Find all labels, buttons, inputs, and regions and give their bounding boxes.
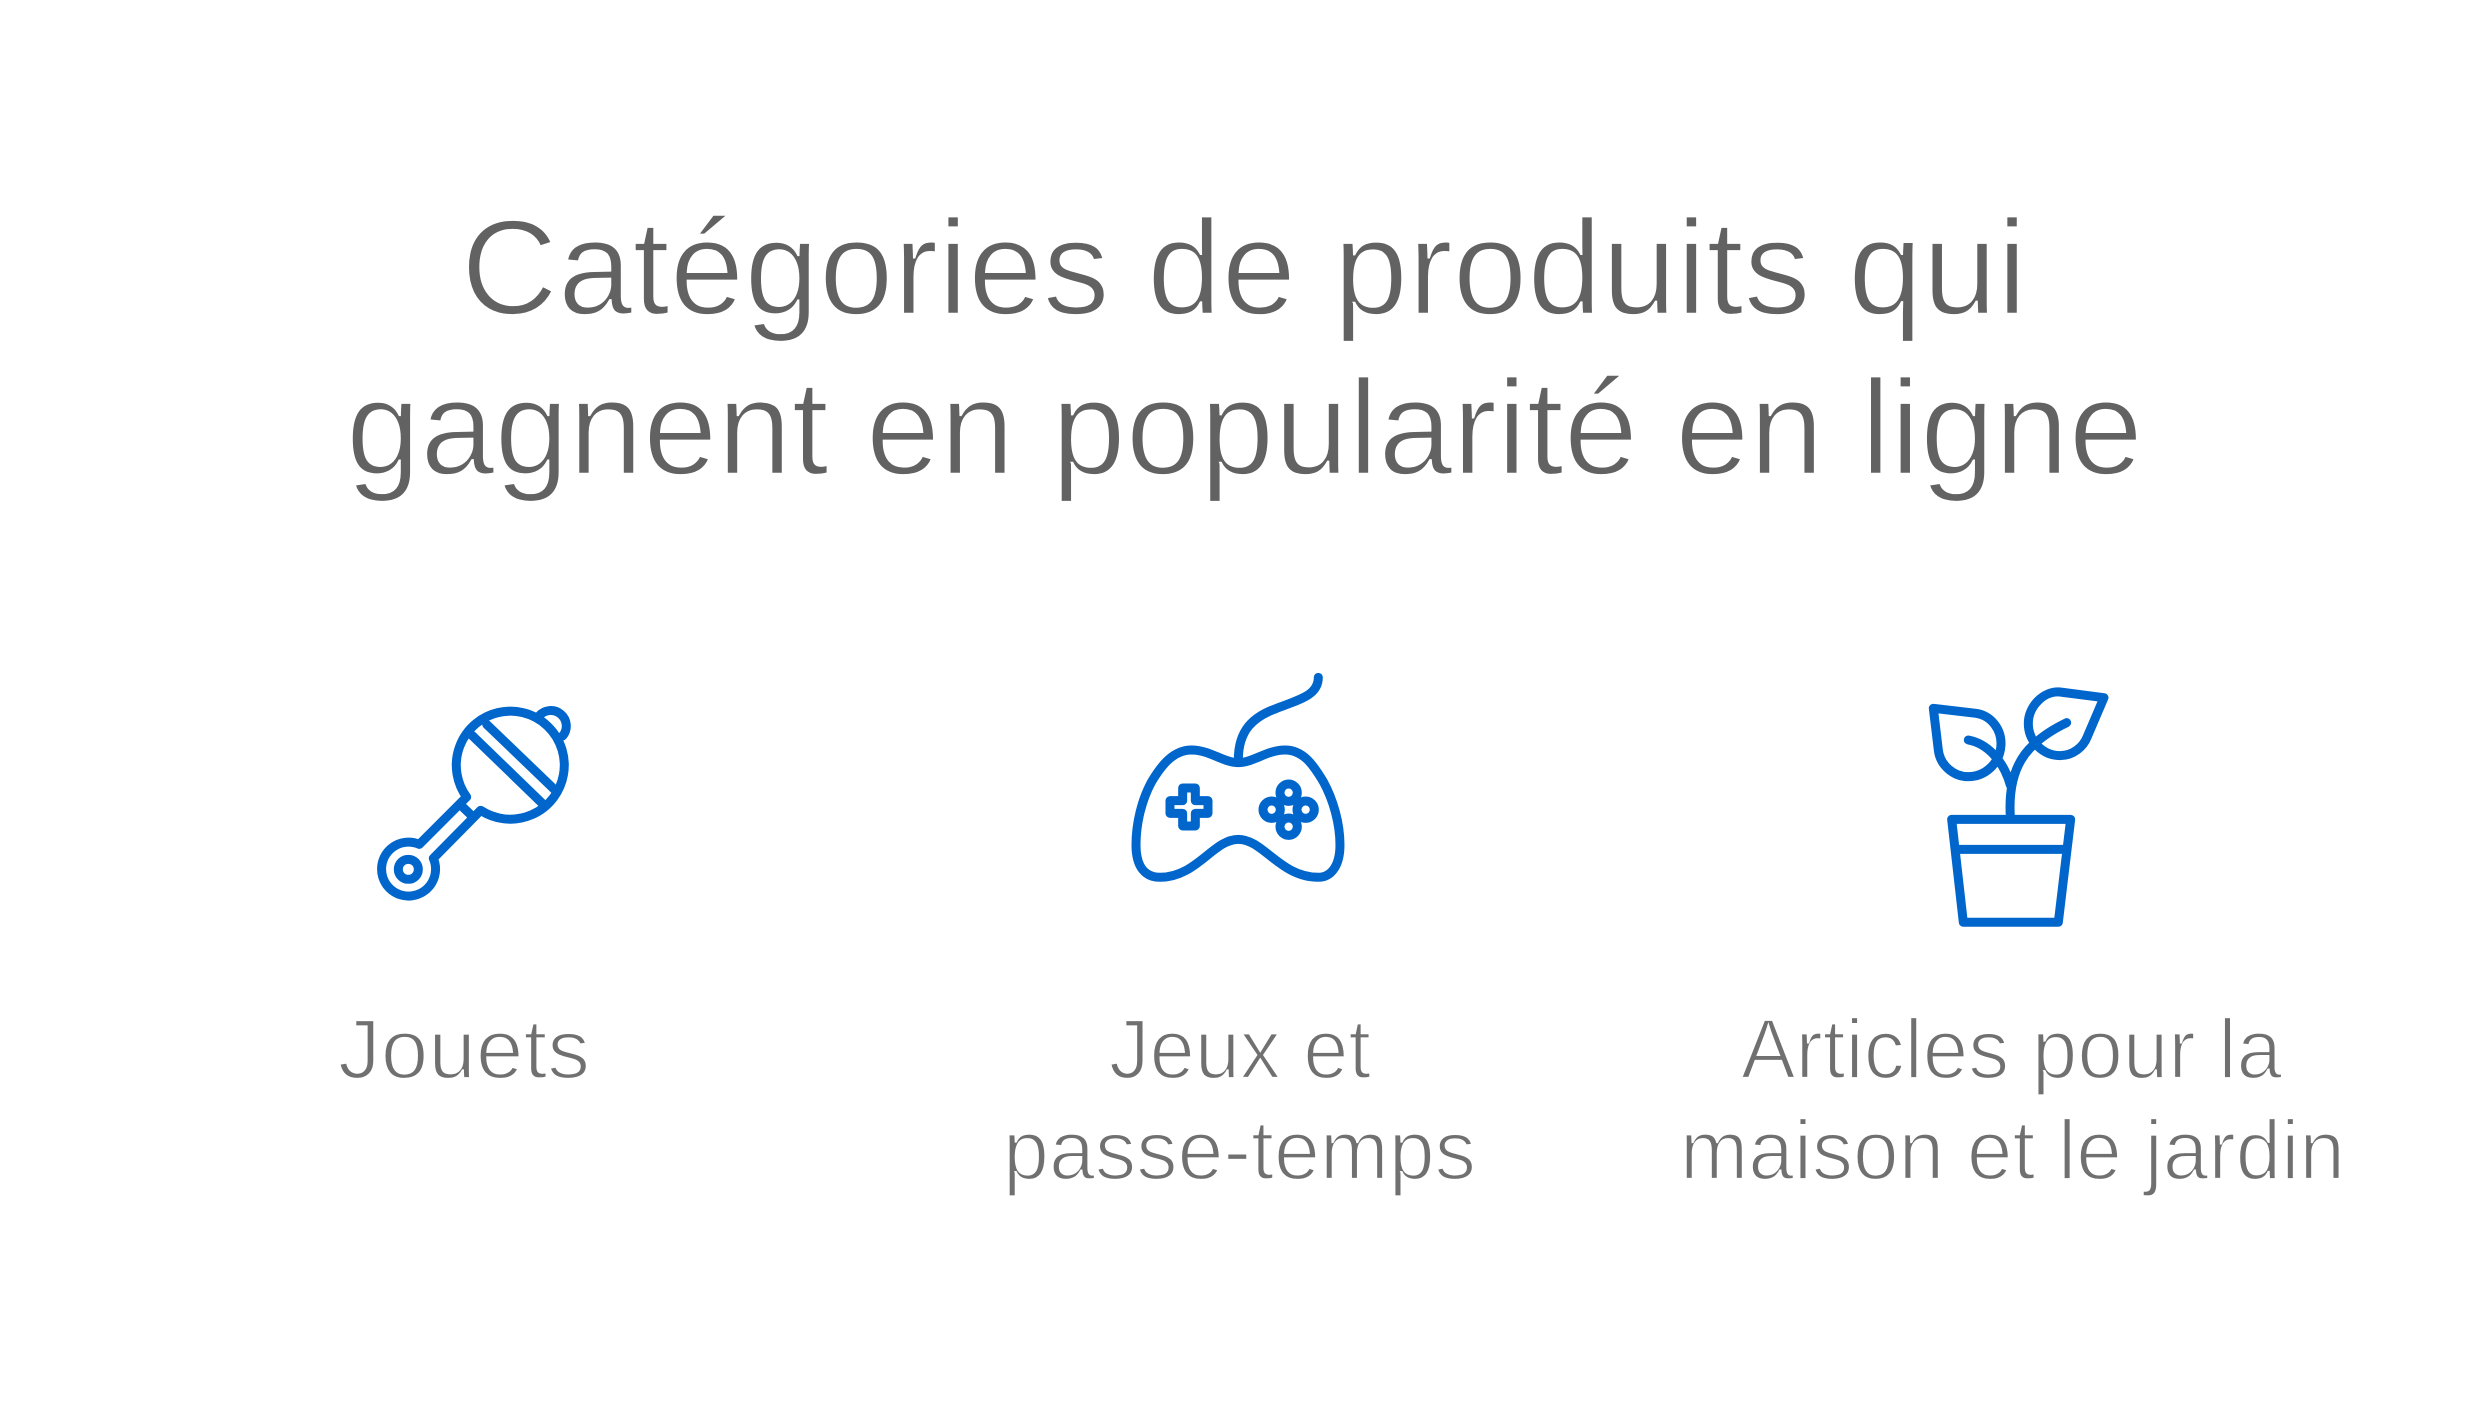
label: Jouets: Jouets — [338, 1002, 590, 1096]
icon: baby rattle — [382, 711, 566, 896]
label: Articles pour la maison et le jardin: Articles pour la — [1741, 1002, 2282, 1096]
title: gagnent en popularité en ligne — [346, 352, 2143, 503]
icon: potted plant — [1933, 692, 2104, 922]
label: Articles pour la maison et le jardin: maison et le jardin — [1680, 1103, 2345, 1197]
label: Articles pour la maison et le jardin — [1680, 1002, 2345, 1197]
icon: game controller — [1136, 677, 1340, 877]
title — [346, 192, 2143, 503]
title: Catégories de produits qui — [461, 192, 2027, 343]
label: Jeux et passe-temps: Jeux et — [1109, 1002, 1371, 1096]
label: Jeux et passe-temps: passe-temps — [1003, 1103, 1476, 1197]
label: Jeux et passe-temps — [1003, 1002, 1476, 1197]
